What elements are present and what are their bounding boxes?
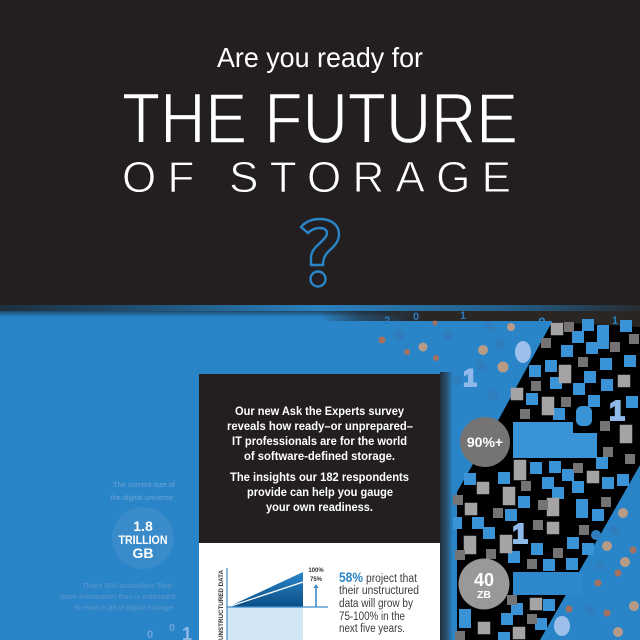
icon: outlined question mark bbox=[301, 219, 339, 286]
header panel bbox=[0, 0, 640, 305]
blue text block bbox=[513, 422, 597, 458]
text: survey introduction bbox=[227, 404, 413, 514]
text: survey introduction: of software-defined storage. bbox=[244, 449, 395, 463]
text: 58% finding: their unstructured bbox=[339, 585, 419, 597]
chart: unstructured data growth: 100% bbox=[308, 568, 324, 574]
text: survey introduction: your own readiness. bbox=[266, 500, 373, 514]
text: 58% finding: next five years. bbox=[339, 623, 405, 635]
callout: 40 ZB bbox=[458, 558, 583, 610]
text: faint explanation: to exist in all of digital storage. bbox=[75, 603, 175, 612]
callout: 40 ZB: 40 bbox=[474, 570, 494, 590]
decorative digits on blue: 0 bbox=[413, 311, 419, 323]
text: survey introduction: The insights our 182 respondents bbox=[230, 470, 409, 484]
header shadow strip bbox=[0, 305, 640, 327]
light blue digit: 1 bbox=[512, 518, 528, 549]
badge: 1.8 trillion GB: GB bbox=[132, 545, 154, 561]
text: faint explanation: more information than is estimated bbox=[60, 592, 175, 601]
text: 58% finding: 58% bbox=[339, 570, 363, 585]
callout: 90%+ bbox=[460, 417, 597, 467]
badge: 1.8 trillion GB bbox=[112, 507, 174, 569]
light grey data squares bbox=[470, 329, 626, 633]
grey circle badge bbox=[458, 558, 510, 610]
chart: unstructured data growth: UNSTRUCTURED DATA bbox=[218, 570, 225, 640]
badge: 1.8 trillion GB: TRILLION bbox=[118, 533, 168, 547]
panel: digital universe fact bbox=[60, 480, 176, 612]
header title line one: THE FUTURE bbox=[122, 80, 518, 159]
decorative digits on blue bbox=[147, 310, 639, 640]
decorative digits on blue: 1 bbox=[463, 365, 477, 392]
text: faint intro: The current size of bbox=[113, 480, 176, 489]
decorative digits on blue: 1 bbox=[460, 310, 466, 322]
decorative digits on blue: 0 bbox=[538, 314, 546, 330]
decorative digits on blue: 0 bbox=[169, 623, 175, 634]
panel: black data pattern bbox=[456, 322, 640, 640]
text: survey introduction: reveals how ready–or unprepared– bbox=[227, 419, 413, 433]
chart: unstructured data growth: 75% bbox=[310, 577, 323, 583]
header title line two: OF STORAGE bbox=[122, 153, 511, 202]
badge: 1.8 trillion GB: 1.8 bbox=[133, 518, 153, 534]
decorative digits on blue: 1 bbox=[612, 315, 618, 327]
text: faint explanation: That's 500 quadrillion "files" bbox=[82, 581, 174, 590]
header subtitle: Are you ready for bbox=[217, 42, 423, 73]
callout: 90%+: 90%+ bbox=[467, 434, 503, 450]
grey circle badge bbox=[460, 417, 510, 467]
panel: survey card bbox=[199, 374, 440, 640]
text: survey introduction: provide can help you gauge bbox=[247, 485, 393, 499]
large blue data square bbox=[576, 406, 592, 426]
chart: unstructured data growth bbox=[218, 568, 328, 640]
text: survey introduction: Our new Ask the Experts survey bbox=[235, 404, 404, 418]
callout: 40 ZB: ZB bbox=[477, 589, 491, 601]
text: faint intro: the digital universe: bbox=[110, 493, 175, 502]
text: 58% finding bbox=[339, 570, 419, 635]
text: survey introduction: IT professionals are for the world bbox=[232, 434, 407, 448]
light blue digit: 1 bbox=[609, 395, 625, 426]
text: 58% finding: project that bbox=[366, 573, 418, 585]
card shadow bbox=[440, 372, 453, 640]
blue data squares bbox=[456, 325, 632, 638]
blue text block bbox=[513, 572, 583, 595]
text: 58% finding: data will grow by bbox=[339, 598, 413, 610]
dark grey data squares bbox=[458, 327, 634, 636]
text: 58% finding: 75-100% in the bbox=[339, 611, 405, 623]
decorative digits on blue: 2 bbox=[384, 315, 390, 327]
